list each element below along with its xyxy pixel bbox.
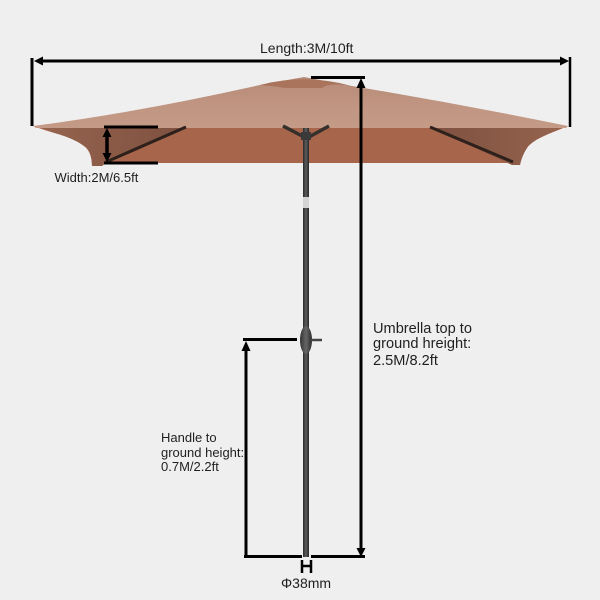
pole diameter label: Φ38mm — [281, 575, 331, 591]
pole band — [303, 197, 309, 208]
umbrella height label: Umbrella top to — [373, 321, 472, 337]
pole diameter marker — [302, 560, 311, 573]
canopy vent — [260, 79, 352, 88]
shaded left corner — [40, 127, 188, 166]
width dimension — [102, 127, 158, 163]
pole — [300, 128, 322, 557]
handle height label: 0.7M/2.2ft — [161, 459, 219, 474]
length label: Length:3M/10ft — [260, 40, 354, 56]
right rib — [430, 127, 513, 162]
handle height dimension — [242, 340, 297, 556]
umbrella height dimension — [311, 78, 366, 557]
left rib — [106, 127, 186, 162]
umbrella height label: ground hreight: — [373, 336, 471, 352]
width label: Width:2M/6.5ft — [54, 170, 139, 185]
canopy underside — [36, 127, 566, 166]
handle height label: Handle to — [161, 430, 217, 445]
handle height label: ground height: — [161, 445, 244, 460]
crank handle — [300, 326, 312, 354]
umbrella — [33, 77, 568, 166]
center ribs — [283, 126, 329, 137]
umbrella height label: 2.5M/8.2ft — [373, 353, 438, 369]
ground line — [244, 555, 365, 558]
length dimension — [32, 56, 570, 127]
shaded right corner — [430, 127, 564, 165]
crank arm — [311, 339, 322, 341]
canopy top — [33, 77, 568, 128]
pole hub — [301, 132, 311, 140]
